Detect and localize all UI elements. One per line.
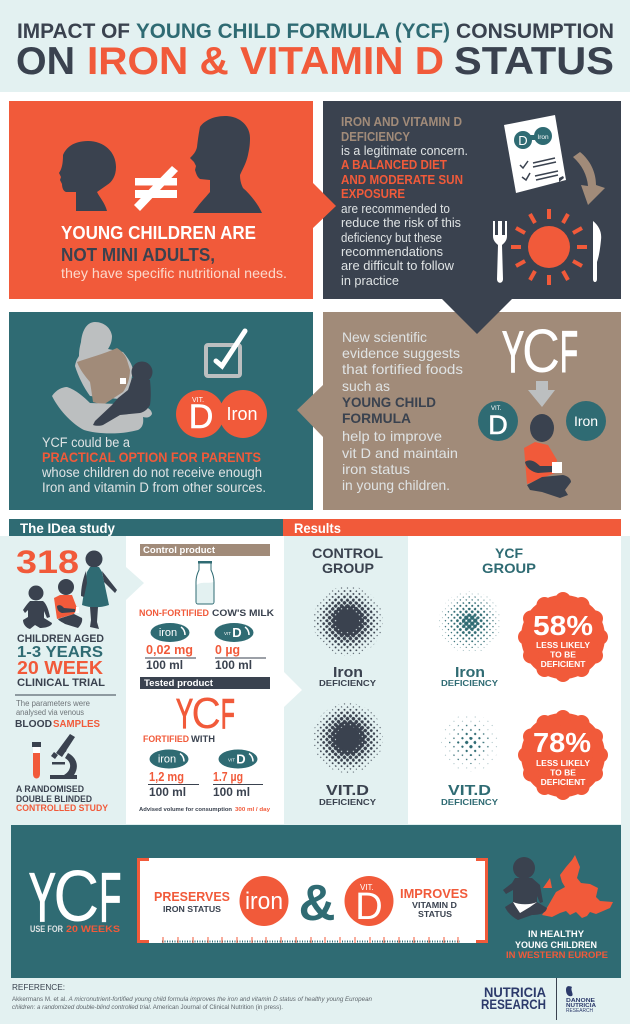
deficiency text: recommendations <box>341 245 443 259</box>
age and duration text: 20 WEEK <box>17 658 103 678</box>
badge: 78 percent: 78% <box>533 727 591 758</box>
illustration: baby <box>503 857 547 920</box>
evidence text: that fortified foods <box>342 361 463 377</box>
deficiency text: in practice <box>341 274 399 288</box>
deficiency text: deficiency but these <box>341 231 442 245</box>
text: improves vitamin D status <box>400 887 468 919</box>
panel: YCF group results <box>439 545 608 807</box>
logo: YCF use for 20 weeks: 20 WEEKS <box>66 924 120 934</box>
label: vit D deficiency: VIT.D <box>326 782 369 799</box>
icon: checkbox <box>206 331 245 376</box>
title line 1: YOUNG CHILD FORMULA (YCF) <box>136 20 450 43</box>
icon: vit D circle: D <box>488 410 508 440</box>
logo: YCF use for 20 weeks <box>29 857 121 937</box>
deficiency text: EXPOSURE <box>341 187 405 201</box>
study design text: CONTROLLED STUDY <box>16 803 109 814</box>
bar: control product: Control product <box>143 545 215 555</box>
tested vitamin D dose: VIT <box>228 758 235 762</box>
text: improves vitamin D status: STATUS <box>418 909 452 919</box>
icon: vit D circle: VIT. <box>491 406 502 412</box>
badge: 78 percent: DEFICIENT <box>541 777 586 787</box>
panel: iron and vitamin D deficiency <box>323 101 621 334</box>
label: fortified with: WITH <box>191 734 215 744</box>
heading bar: The IDea study: The IDea study <box>20 520 115 536</box>
evidence text: such as <box>342 378 390 394</box>
age and duration text <box>17 633 105 689</box>
logo: YCF red: C <box>191 688 221 738</box>
illustration: child with cup <box>524 414 571 498</box>
deficiency text: are difficult to follow <box>341 259 455 273</box>
logo: YCF use for 20 weeks: C <box>53 857 99 937</box>
icon: vit D and iron circles: D <box>189 398 213 436</box>
study design text: A RANDOMISED <box>16 784 84 795</box>
evidence text: FORMULA <box>342 410 411 426</box>
icon: iron circle <box>240 876 288 926</box>
badge: 58 percent: LESS LIKELY <box>536 640 590 650</box>
heading: YCF group: YCF <box>495 545 523 561</box>
age and duration text: CLINICAL TRIAL <box>17 677 105 689</box>
note: advised volume: Advised volume for consumption <box>139 807 233 813</box>
header band with title <box>0 0 630 92</box>
halftone: control iron <box>313 586 383 656</box>
icon: iron circle <box>566 401 606 441</box>
deficiency text: AND MODERATE SUN <box>341 173 463 187</box>
evidence text: vit D and maintain <box>342 445 458 461</box>
logo: YCF <box>502 317 578 385</box>
title line 2: IRON & VITAMIN D <box>87 40 444 83</box>
halftone: YCF iron <box>439 591 501 653</box>
parents text: PRACTICAL OPTION FOR PARENTS <box>42 450 261 465</box>
arrow: down to child <box>528 381 555 407</box>
icon: checklist document: D <box>518 133 528 148</box>
logo: YCF: F <box>560 320 578 385</box>
title line 2: ON <box>16 40 75 83</box>
control vitamin D dose: 0 µg <box>215 643 240 657</box>
icon: vit D circle: VIT. <box>360 883 374 892</box>
logo: YCF red <box>176 688 235 738</box>
logo: YCF: C <box>522 317 560 385</box>
parents text: Iron and vitamin D from other sources. <box>42 480 266 495</box>
badge: 58 percent <box>518 592 608 682</box>
label: non-fortified cow's milk: COW'S MILK <box>212 608 275 618</box>
panel: conclusion <box>11 825 621 978</box>
deficiency text: is a legitimate concern. <box>341 144 468 158</box>
blood samples text: The parameters were <box>16 699 91 708</box>
control iron dose: iron <box>159 627 177 639</box>
badge: 58 percent: DEFICIENT <box>541 659 586 669</box>
tested iron dose: iron <box>158 754 176 766</box>
icon: sun <box>511 209 587 285</box>
icon: vit D circle <box>344 876 394 928</box>
logo: Danone Nutricia Research <box>566 986 596 1014</box>
text: in healthy young children: IN WESTERN EUROPE <box>506 950 608 961</box>
heading: control group: CONTROL <box>312 545 383 561</box>
age and duration text: 1-3 YEARS <box>17 644 103 661</box>
logo: YCF red: Y <box>176 691 193 738</box>
evidence text <box>342 329 463 493</box>
label: non-fortified cow's milk: NON-FORTIFIED <box>139 608 209 618</box>
icon: checklist document: Iron <box>537 134 549 141</box>
label: YCF iron deficiency <box>441 664 498 688</box>
badge: 78 percent: LESS LIKELY <box>536 758 590 768</box>
halftone: YCF vit D <box>441 714 499 772</box>
icon: vit D and iron circles: VIT. <box>192 397 204 404</box>
deficiency text: DEFICIENCY <box>341 130 411 144</box>
icon: vit D circle: D <box>355 886 383 928</box>
label: YCF vit D deficiency: DEFICIENCY <box>441 797 498 807</box>
panel: products <box>139 544 275 813</box>
text: in healthy young children <box>506 929 608 961</box>
title line 1: IMPACT OF <box>17 20 130 43</box>
box: preserves iron and improves vitamin D <box>137 858 488 943</box>
icon: iron circle: iron <box>245 888 283 915</box>
deficiency text: are recommended to <box>341 202 450 216</box>
logo: Danone Nutricia Research: NUTRICIA <box>566 1003 596 1009</box>
evidence text: New scientific <box>342 329 427 345</box>
parents text: YCF could be a <box>42 435 130 450</box>
illustration: map of Europe <box>542 855 613 918</box>
text: preserves iron status <box>154 889 230 914</box>
panel text: they have specific nutritional needs. <box>61 265 287 281</box>
evidence text: help to improve <box>342 428 442 444</box>
icon: vit D and iron circles <box>176 390 267 438</box>
logo: YCF use for 20 weeks: F <box>99 859 121 936</box>
logo: Nutricia Research <box>481 978 557 1020</box>
blood samples text: SAMPLES <box>53 719 100 730</box>
control vitamin D dose <box>214 623 266 672</box>
icon: adult head silhouette <box>190 116 262 213</box>
panel text: YOUNG CHILDREN ARE <box>61 223 256 243</box>
reference text: Akkermans M. et al. A micronutrient-fortified young child formula improves the iron and vitamin D status of healthy young European <box>12 997 373 1003</box>
icon: vit D circle <box>478 401 518 441</box>
label: YCF iron deficiency: Iron <box>455 664 485 681</box>
label: iron deficiency <box>319 664 376 688</box>
control iron dose <box>145 623 196 672</box>
bar: tested product: Tested product <box>144 678 213 688</box>
note: advised volume: 300 ml / day <box>235 807 271 813</box>
badge: 58 percent: TO BE <box>550 650 576 660</box>
control iron dose: 0,02 mg <box>146 643 193 657</box>
deficiency text: reduce the risk of this <box>341 216 461 230</box>
panel: control group results <box>312 545 383 807</box>
text: preserves iron status: IRON STATUS <box>163 904 221 914</box>
evidence text: evidence suggests <box>342 345 460 361</box>
heading bar: The IDea study <box>9 519 283 536</box>
text: in healthy young children: IN HEALTHY <box>528 929 585 940</box>
panel: new scientific evidence <box>297 312 621 510</box>
icon: vit D and iron circles: Iron <box>226 404 258 424</box>
logo: Danone Nutricia Research: RESEARCH <box>566 1008 593 1014</box>
blood samples text <box>15 699 100 730</box>
blood samples text: BLOOD <box>15 719 52 730</box>
text: improves vitamin D status: IMPROVES <box>400 887 468 901</box>
study design text: DOUBLE BLINDED <box>16 794 92 805</box>
heading: control group: GROUP <box>322 560 374 576</box>
icon: checklist document <box>504 115 566 193</box>
icon: curved arrow <box>573 152 605 205</box>
logo: YCF: Y <box>502 320 524 385</box>
footer background <box>0 824 630 1024</box>
panel: young children are not mini adults <box>9 101 336 299</box>
parents text <box>41 435 266 495</box>
panel text <box>61 223 287 281</box>
heading bar: Results <box>283 519 621 536</box>
icon: not equal sign <box>134 166 178 211</box>
badge: 78 percent: TO BE <box>550 768 576 778</box>
logo: YCF use for 20 weeks: USE FOR <box>30 924 63 934</box>
ampersand: & <box>299 874 335 931</box>
reference text: children: a randomized double-blind controlled trial. American Journal of Clinical Nutrition (in press). <box>12 1005 283 1011</box>
title line 2: STATUS <box>454 40 614 83</box>
stat: 318: 318 <box>16 544 79 580</box>
logo: YCF red: F <box>221 691 235 738</box>
label: YCF iron deficiency: DEFICIENCY <box>441 678 498 688</box>
text: improves vitamin D status: VITAMIN D <box>412 900 457 910</box>
panel: study population <box>15 544 117 814</box>
evidence text: in young children. <box>342 477 450 493</box>
bar: tested product <box>140 677 270 689</box>
label: YCF vit D deficiency: VIT.D <box>448 782 491 799</box>
icon: fork <box>493 221 507 283</box>
heading: YCF group: GROUP <box>482 560 536 576</box>
section background columns <box>0 536 630 824</box>
tested vitamin D dose <box>213 750 263 799</box>
panel: practical option for parents <box>9 312 313 510</box>
control iron dose: 100 ml <box>146 658 183 672</box>
icon: milk bottle <box>196 561 214 604</box>
badge: 78 percent <box>518 710 608 800</box>
evidence text: YOUNG CHILD <box>342 394 436 410</box>
illustration: mother and child <box>52 322 152 433</box>
tested iron dose: 1,2 mg <box>149 770 184 784</box>
tested iron dose <box>148 750 199 799</box>
tested iron dose: 100 ml <box>149 785 186 799</box>
label: iron deficiency: DEFICIENCY <box>319 678 376 688</box>
age and duration text: CHILDREN AGED <box>17 633 104 645</box>
illustration: three children <box>23 550 117 629</box>
label: iron deficiency: Iron <box>333 664 363 681</box>
icon: test tube <box>32 742 41 778</box>
logo: YCF use for 20 weeks: Y <box>29 859 56 936</box>
badge: 58 percent: 58% <box>533 610 593 641</box>
halftone: control vit D <box>313 703 383 773</box>
text: in healthy young children: YOUNG CHILDREN <box>515 940 597 951</box>
tested vitamin D dose: 100 ml <box>213 785 250 799</box>
title line 1: CONSUMPTION <box>456 20 614 43</box>
logo: Nutricia Research: NUTRICIA <box>484 984 546 1000</box>
icon: iron circle: Iron <box>574 413 598 429</box>
heading bar: Results: Results <box>294 520 341 536</box>
control vitamin D dose: 100 ml <box>215 658 252 672</box>
text: preserves iron status: PRESERVES <box>154 889 230 904</box>
reference text <box>12 982 373 1011</box>
deficiency text: IRON AND VITAMIN D <box>341 115 462 129</box>
label: fortified with: FORTIFIED <box>143 734 189 744</box>
tested vitamin D dose: D <box>236 752 246 766</box>
reference text: REFERENCE: <box>12 982 65 992</box>
control vitamin D dose: VIT <box>224 631 231 636</box>
deficiency text <box>341 115 468 288</box>
study design text <box>16 784 109 814</box>
bar: control product <box>140 544 270 556</box>
icon: microscope <box>50 734 77 779</box>
logo: Danone Nutricia Research: DANONE <box>566 998 595 1004</box>
evidence text: iron status <box>342 461 410 477</box>
deficiency text: A BALANCED DIET <box>341 158 447 172</box>
parents text: whose children do not receive enough <box>41 465 262 480</box>
control vitamin D dose: D <box>232 625 242 640</box>
label: YCF vit D deficiency <box>441 782 498 807</box>
label: vit D deficiency <box>319 782 376 807</box>
panel text: NOT MINI ADULTS, <box>61 245 215 265</box>
tested vitamin D dose: 1.7 µg <box>213 770 243 784</box>
blood samples text: analysed via venous <box>16 708 84 717</box>
icon: knife <box>593 221 601 282</box>
label: vit D deficiency: DEFICIENCY <box>319 797 376 807</box>
icon: child head silhouette <box>59 141 116 211</box>
logo: Nutricia Research: RESEARCH <box>481 996 546 1012</box>
